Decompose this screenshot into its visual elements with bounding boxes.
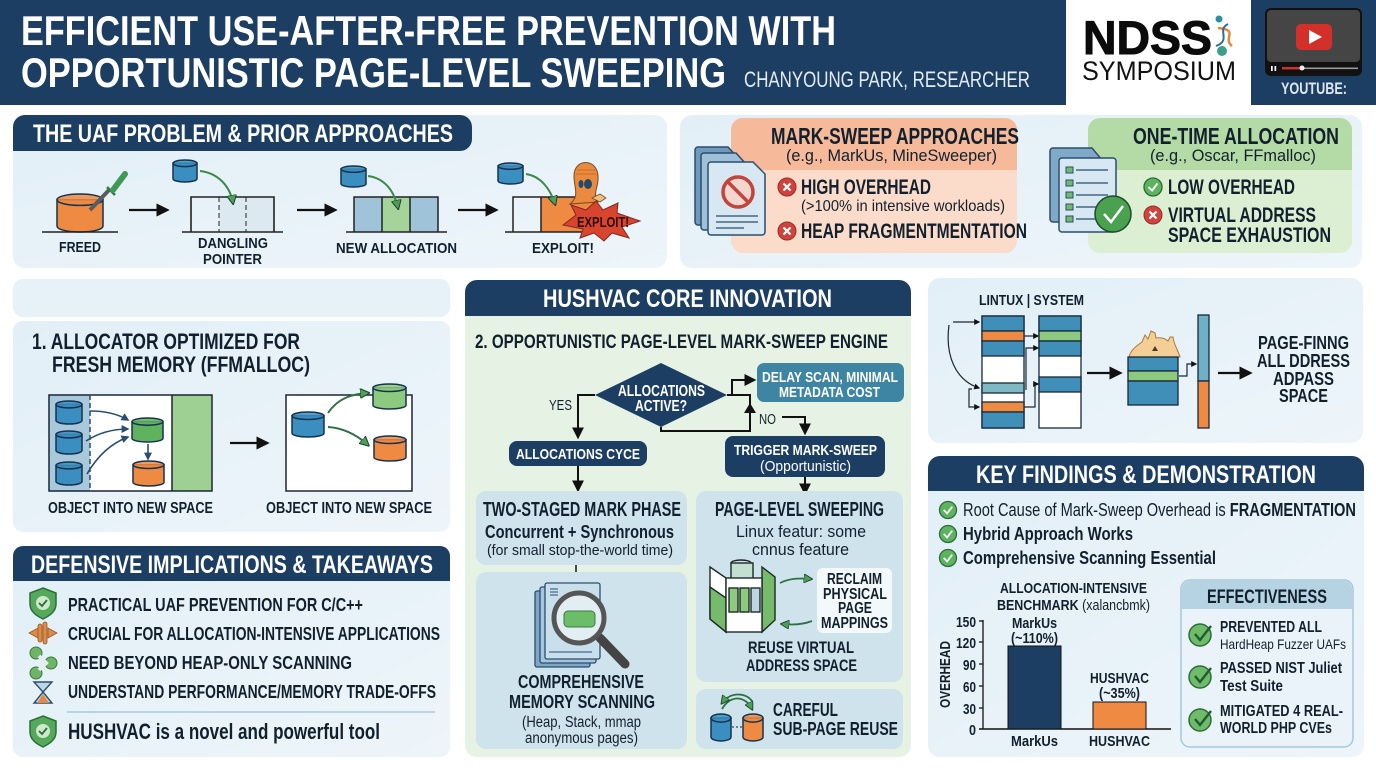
icon: DNA helix (1216, 16, 1232, 56)
box: delay scan: METADATA COST (779, 385, 880, 401)
findings list (940, 500, 1356, 568)
arrow (230, 442, 267, 444)
card: mark-sweep approaches: (>100% in intensive workloads) (801, 198, 1005, 215)
step: exploit: EXPLOIT! (532, 240, 594, 257)
chart title: BENCHMARK (xalancbmk) (997, 597, 1150, 614)
NDSS symposium logo: NDSS (1083, 11, 1212, 64)
callout: reclaim physical page mappings (817, 568, 892, 633)
title: EFFICIENT USE-AFTER-FREE PREVENTION WITH (21, 7, 836, 54)
y axis: 90 (963, 657, 976, 674)
captions (48, 500, 432, 517)
label: yes: YES (549, 398, 572, 414)
card: effectiveness: HardHeap Fuzzer UAFs (1220, 636, 1346, 652)
card: effectiveness: MITIGATED 4 REAL- (1220, 703, 1343, 720)
label: linux system: LINTUX | SYSTEM (979, 293, 1084, 309)
card: comprehensive memory scanning: COMPREHENSIVE (518, 671, 644, 692)
chart title: ALLOCATION-INTENSIVE (1000, 580, 1147, 597)
captions: OBJECT INTO NEW SPACE (266, 500, 432, 517)
icon: monster (570, 162, 606, 204)
arrow (129, 209, 167, 211)
panel: defensive implications (13, 546, 450, 757)
box: trigger mark-sweep: (Opportunistic) (760, 458, 851, 475)
heading: key findings (928, 456, 1364, 491)
heading: allocator: 1. ALLOCATOR OPTIMIZED FOR (32, 329, 300, 354)
card: effectiveness: Test Suite (1220, 678, 1283, 695)
step: dangling pointer (173, 160, 283, 268)
text: page-finning: ADPASS (1273, 369, 1334, 389)
card: one-time allocation (1088, 118, 1352, 253)
diagram: address bar (1198, 315, 1209, 428)
conclusion: HUSHVAC is a novel and powerful tool (68, 719, 380, 744)
panel: linux system page diagram (928, 278, 1363, 443)
card: page-level sweeping: Linux featur: some (736, 522, 866, 541)
icon: documents with prohibition sign (695, 147, 765, 235)
card: page-level sweeping: REUSE VIRTUAL (748, 638, 854, 657)
card: page-level sweeping: PAGE-LEVEL SWEEPING (715, 499, 884, 521)
takeaway 4: UNDERSTAND PERFORMANCE/MEMORY TRADE-OFFS (68, 681, 436, 702)
heading: UAF problem: THE UAF PROBLEM & PRIOR APPROACHES (33, 120, 453, 148)
diagram: object placement after (286, 384, 412, 491)
heading: allocator (32, 329, 310, 377)
subheading: engine: 2. OPPORTUNISTIC PAGE-LEVEL MARK-SWEEP ENGINE (475, 331, 888, 353)
box: trigger mark-sweep (725, 436, 885, 477)
diagram: mapping arrows (948, 322, 1038, 407)
icon: shield (30, 716, 56, 747)
video thumbnail (1265, 8, 1362, 76)
card: two-staged mark phase: (for small stop-the-world time) (487, 543, 673, 559)
card: careful sub-page reuse (696, 689, 903, 749)
text: page-finning: SPACE (1279, 386, 1328, 406)
findings list: Comprehensive Scanning Essential (963, 548, 1216, 568)
icon: hourglass (34, 682, 52, 703)
callout: reclaim physical page mappings: PHYSICAL (823, 586, 887, 603)
author: CHANYOUNG PARK, RESEARCHER (744, 67, 1030, 92)
y axis: 150 (956, 614, 976, 631)
header banner (0, 0, 1066, 105)
exploit burst: EXPLOIT! (577, 214, 629, 231)
y axis: 60 (963, 679, 976, 696)
arrow (297, 209, 335, 211)
step: dangling pointer: DANGLING (198, 235, 268, 252)
panel: HUSHVAC core innovation (465, 280, 911, 757)
heading: core innovation (465, 280, 911, 316)
card: comprehensive memory scanning: anonymous pages) (525, 730, 638, 747)
findings list: Root Cause of Mark-Sweep Overhead is FRAGMENTATION (963, 500, 1356, 520)
bar: HUSHVAC: HUSHVAC (1090, 670, 1149, 687)
card: effectiveness: PASSED NIST Juliet (1220, 660, 1343, 677)
bar: MarkUs: (~110%) (1011, 630, 1058, 647)
flowchart connectors (576, 380, 805, 572)
step: new allocation (336, 166, 457, 257)
diagram: page table column 1 (982, 316, 1024, 428)
panel: prior approaches (680, 115, 1362, 268)
card: two-staged mark phase: TWO-STAGED MARK PHASE (483, 499, 681, 521)
panel: UAF problem (13, 115, 667, 268)
bar: MarkUs: MarkUs (1012, 615, 1057, 632)
panel: key findings (928, 456, 1364, 757)
callout: reclaim physical page mappings: MAPPINGS (821, 615, 888, 632)
bar: HUSHVAC (1089, 670, 1150, 750)
takeaway 2: CRUCIAL FOR ALLOCATION-INTENSIVE APPLICATIONS (68, 623, 440, 644)
panel: allocator optimized (13, 321, 450, 532)
card: effectiveness: PREVENTED ALL (1220, 619, 1322, 636)
card: two-staged mark phase: Concurrent + Synchronous (485, 522, 674, 542)
step: exploit (498, 162, 640, 257)
NDSS symposium logo (1066, 0, 1251, 105)
diagram: object placement before (49, 395, 212, 491)
title (21, 7, 836, 96)
youtube video panel (1251, 0, 1376, 105)
card: mark-sweep approaches: MARK-SWEEP APPROACHES (771, 123, 1019, 149)
arrow (1218, 372, 1250, 374)
callout: reclaim physical page mappings: PAGE (838, 600, 872, 617)
card: mark-sweep approaches: HEAP FRAGMENTMENTATION (801, 220, 1027, 243)
decision: allocations active: ACTIVE? (635, 398, 687, 415)
takeaway 3: NEED BEYOND HEAP-ONLY SCANNING (68, 652, 352, 673)
icon: shield (30, 588, 56, 619)
heading: allocator: FRESH MEMORY (FFMALLOC) (52, 352, 310, 377)
card: effectiveness: EFFECTIVENESS (1207, 586, 1327, 608)
step: new allocation: NEW ALLOCATION (336, 240, 457, 257)
card: one-time allocation: (e.g., Oscar, FFmalloc) (1150, 146, 1316, 165)
icon: checklist documents (1050, 148, 1131, 232)
icon: nodes (30, 647, 57, 679)
bar: MarkUs: MarkUs (1011, 733, 1058, 750)
heading: UAF problem (13, 115, 472, 151)
card: comprehensive memory scanning (476, 572, 687, 749)
card: one-time allocation: VIRTUAL ADDRESS (1168, 204, 1316, 227)
decision: allocations active (595, 363, 727, 427)
text: page-finning: PAGE-FINNG (1258, 333, 1349, 353)
captions: OBJECT INTO NEW SPACE (48, 500, 213, 517)
card: comprehensive memory scanning: MEMORY SCANNING (509, 691, 655, 712)
box: trigger mark-sweep: TRIGGER MARK-SWEEP (734, 442, 877, 459)
icon: page box (710, 560, 775, 632)
box: delay scan: DELAY SCAN, MINIMAL (762, 370, 898, 386)
text: page-finning: ALL DDRESS (1257, 351, 1350, 371)
card: one-time allocation: SPACE EXHAUSTION (1168, 224, 1331, 247)
callout: reclaim physical page mappings: RECLAIM (827, 571, 882, 588)
heading: defensive implications (13, 546, 450, 581)
heading: core innovation: HUSHVAC CORE INNOVATION (543, 285, 832, 313)
card: two-staged mark phase (476, 491, 687, 565)
youtube label: YOUTUBE: (1281, 79, 1347, 98)
diagram: page table column 2 (1039, 316, 1081, 428)
bar chart: overhead (937, 580, 1171, 750)
card: mark-sweep approaches (731, 118, 1027, 253)
y axis: OVERHEAD (937, 641, 954, 708)
box: allocations cycle: ALLOCATIONS CYCE (516, 446, 640, 463)
box: delay scan (757, 363, 904, 402)
takeaway 1: PRACTICAL UAF PREVENTION FOR C/C++ (68, 594, 363, 615)
panel: empty strip (13, 279, 450, 317)
step: dangling pointer: POINTER (203, 251, 262, 268)
card: careful sub-page reuse: CAREFUL (773, 699, 838, 720)
card: page-level sweeping (696, 491, 903, 682)
icon: allocation burst (29, 622, 57, 644)
card: comprehensive memory scanning: (Heap, Stack, mmap (522, 714, 641, 731)
card: careful sub-page reuse: SUB-PAGE REUSE (773, 718, 898, 739)
y axis (937, 614, 1171, 739)
findings list: Hybrid Approach Works (963, 524, 1133, 544)
step: freed (42, 174, 125, 256)
card: effectiveness (1181, 580, 1353, 747)
decision: allocations active: ALLOCATIONS (618, 383, 705, 400)
card: page-level sweeping: ADDRESS SPACE (746, 656, 857, 675)
box: allocations cycle (509, 441, 647, 466)
diagram: stacked heap with pile (1128, 331, 1180, 405)
arrow (1087, 372, 1120, 374)
step: freed: FREED (59, 239, 101, 256)
icon: magnified documents (535, 583, 625, 667)
NDSS symposium logo: SYMPOSIUM (1082, 56, 1236, 86)
card: page-level sweeping: cnnus feature (752, 540, 849, 559)
bar: HUSHVAC: HUSHVAC (1089, 733, 1150, 750)
card: effectiveness: WORLD PHP CVEs (1220, 720, 1332, 737)
text: page-finning (1257, 333, 1350, 406)
label: no: NO (759, 412, 776, 428)
y axis: 120 (956, 635, 976, 652)
chart title (997, 580, 1150, 614)
title: OPPORTUNISTIC PAGE-LEVEL SWEEPING (21, 49, 726, 96)
heading: defensive implications: DEFENSIVE IMPLICATIONS & TAKEAWAYS (31, 551, 433, 579)
bar: HUSHVAC: (~35%) (1099, 685, 1140, 702)
card: mark-sweep approaches: HIGH OVERHEAD (801, 176, 931, 199)
y axis: 30 (963, 701, 976, 718)
card: one-time allocation: LOW OVERHEAD (1168, 176, 1295, 199)
arrow (458, 209, 496, 211)
card: mark-sweep approaches: (e.g., MarkUs, MineSweeper) (786, 146, 997, 165)
bar: MarkUs (1008, 615, 1061, 750)
exploit burst (563, 201, 640, 241)
y axis: 0 (969, 722, 976, 739)
